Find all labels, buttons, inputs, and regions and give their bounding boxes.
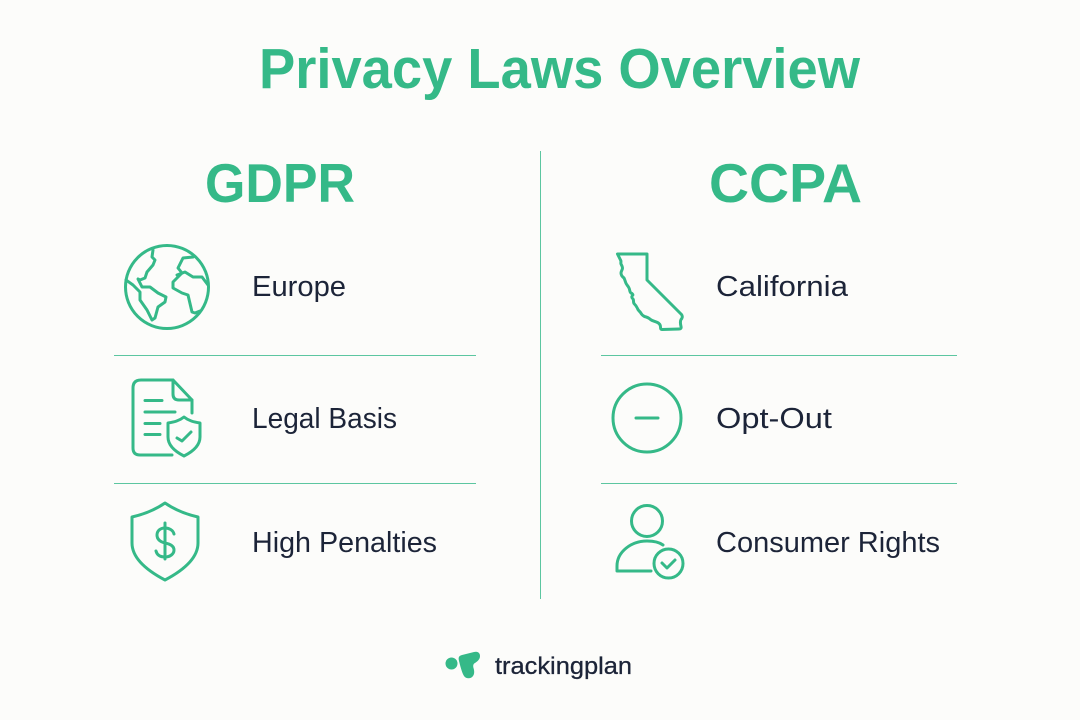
icon: shield with dollar xyxy=(132,503,198,580)
label: Europe: Europe xyxy=(252,271,346,303)
heading: CCPA: CCPA xyxy=(709,152,862,214)
icon: California xyxy=(618,254,682,330)
label: Legal Basis: Legal Basis xyxy=(252,403,397,435)
logo: trackingplan xyxy=(446,652,632,680)
label: California: California xyxy=(716,271,849,303)
icon: document with shield xyxy=(133,380,200,456)
icon: logo mark xyxy=(446,652,480,678)
label: Consumer Rights: Consumer Rights xyxy=(716,527,940,559)
icon: minus circle xyxy=(613,384,681,452)
icon: person with check xyxy=(617,506,683,578)
heading: GDPR: GDPR xyxy=(205,152,355,214)
title: Privacy Laws Overview xyxy=(259,37,861,101)
wordmark: trackingplan xyxy=(495,653,632,680)
panel: CCPA xyxy=(601,152,957,578)
label: Opt-Out: Opt-Out xyxy=(716,403,832,435)
icon: globe xyxy=(126,246,208,328)
panel: GDPR xyxy=(114,152,476,580)
label: High Penalties: High Penalties xyxy=(252,527,437,559)
